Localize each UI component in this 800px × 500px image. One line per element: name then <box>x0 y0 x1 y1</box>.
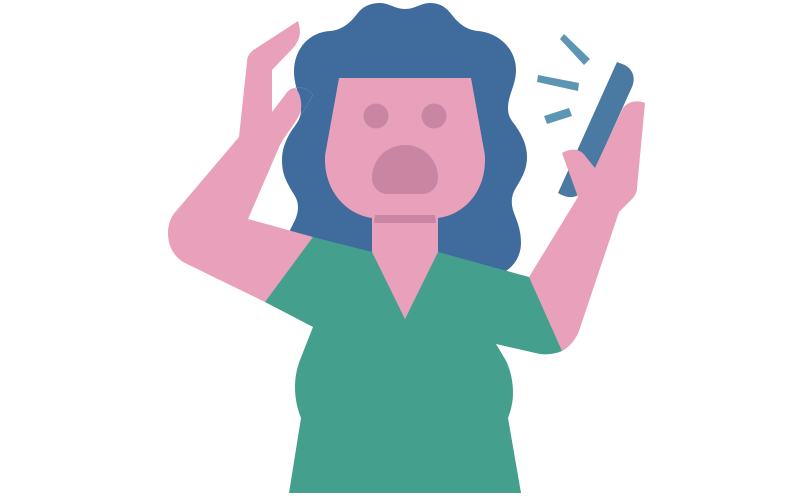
neck <box>372 210 438 319</box>
right eye <box>422 104 446 128</box>
left eye <box>364 104 388 128</box>
neck shadow <box>374 215 436 223</box>
face <box>325 78 485 220</box>
hair <box>282 3 527 275</box>
left fingertip outline <box>295 87 313 115</box>
shirt <box>265 237 562 493</box>
right arm and hand <box>529 101 645 351</box>
left arm and hand <box>168 21 316 302</box>
mouth <box>372 145 438 194</box>
vibration lines <box>537 34 590 124</box>
phone <box>558 62 634 197</box>
